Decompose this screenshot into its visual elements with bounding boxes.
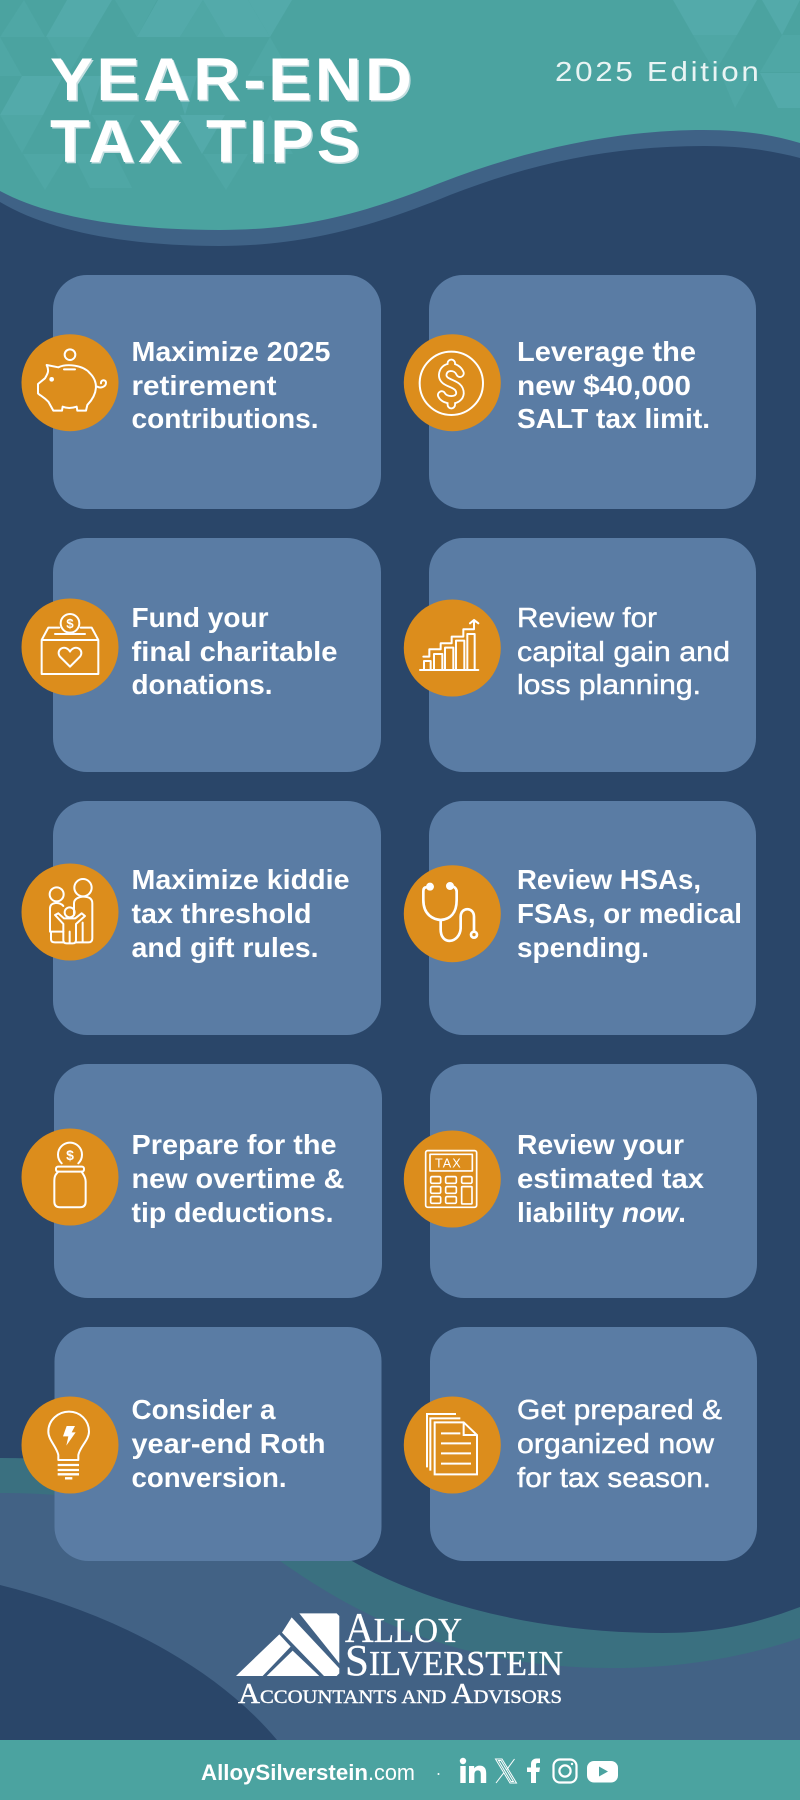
icon: facebook [527, 1758, 540, 1783]
icon: family [50, 879, 92, 943]
tip text: Consider a [132, 1394, 276, 1425]
tip text: capital gain and [517, 636, 730, 667]
icon: light bulb [48, 1412, 89, 1478]
tip text [517, 1129, 704, 1228]
tip text: organized now [517, 1428, 715, 1459]
logo wordmark: ALLOY [345, 1606, 462, 1652]
tip text: and gift rules. [132, 932, 318, 963]
logo wordmark: ACCOUNTANTS AND ADVISORS [238, 1679, 562, 1710]
tip text: retirement [132, 370, 276, 401]
panel: kiddie tax and gift rules [22, 801, 381, 1035]
title: TAX TIPS [50, 108, 360, 175]
tip text: loss planning. [517, 669, 701, 700]
tip text: donations. [132, 669, 272, 700]
tip text: final charitable [132, 636, 338, 667]
panel: retirement contributions [22, 275, 381, 509]
title: YEAR-END [52, 48, 413, 115]
icon: X [496, 1759, 516, 1783]
tip text [517, 864, 742, 963]
title: TAX TIPS [52, 110, 361, 177]
tip text: Maximize kiddie [132, 864, 350, 895]
logo mark [236, 1613, 339, 1676]
logo wordmark [238, 1606, 563, 1710]
icon: donation box [42, 614, 98, 674]
tip text: for tax season. [517, 1462, 711, 1493]
website: .com [368, 1760, 415, 1785]
tip text: year-end Roth [132, 1428, 326, 1459]
title: YEAR-END [50, 46, 412, 113]
icon: rising bar chart [420, 620, 478, 670]
icon: dollar coin [420, 352, 483, 415]
icon: money jar [54, 1143, 86, 1207]
tip text [517, 336, 710, 434]
tip text: liability now. [517, 1197, 686, 1228]
website: AlloySilverstein [201, 1760, 368, 1785]
tip text: FSAs, or medical [517, 898, 742, 929]
tip text [132, 1129, 344, 1228]
panel: Roth conversion [22, 1327, 382, 1561]
panel: overtime and tip deductions [22, 1064, 382, 1298]
icon: instagram [554, 1760, 576, 1782]
tip text: spending. [517, 932, 649, 963]
tip text: new overtime & [132, 1163, 344, 1194]
tip text [132, 336, 330, 434]
icon: piggy bank [38, 349, 106, 411]
tip text: Review for [517, 602, 657, 633]
tip text: SALT tax limit. [517, 403, 710, 434]
tip text [132, 864, 350, 963]
tip text: tax threshold [132, 898, 312, 929]
tip text [132, 602, 338, 700]
tip text: tip deductions. [132, 1197, 334, 1228]
tip text: new $40,000 [517, 370, 691, 401]
tip text: Leverage the [517, 336, 696, 367]
icon: documents [427, 1414, 477, 1474]
tip text: Review your [517, 1129, 684, 1160]
tip text: Prepare for the [132, 1129, 336, 1160]
title [50, 46, 413, 177]
edition label: 2025 Edition [555, 57, 759, 88]
tip text: contributions. [132, 403, 318, 434]
footer wave background [0, 1458, 800, 1740]
icon: money jar: $ [66, 1147, 74, 1163]
separator dot [438, 1773, 440, 1775]
tip text [517, 1394, 722, 1493]
panel: estimated tax liability [404, 1064, 757, 1298]
tip text: Maximize 2025 [132, 336, 330, 367]
icon: youtube [587, 1761, 618, 1782]
panel: charitable donations [22, 538, 381, 772]
header banner with wave [0, 0, 800, 246]
logo wordmark: SILVERSTEIN [345, 1636, 563, 1685]
icon: donation box: $ [66, 616, 74, 631]
panel: capital gain and loss [404, 538, 756, 772]
tip text: Fund your [132, 602, 269, 633]
icon: stethoscope [423, 883, 477, 941]
icon: tax calculator: TAX [435, 1156, 461, 1170]
panel: HSAs and FSAs [404, 801, 756, 1035]
tip text: Review HSAs, [517, 864, 701, 895]
tip text: conversion. [132, 1462, 286, 1493]
panel: prepared for tax season [404, 1327, 757, 1561]
icon: tax calculator [426, 1151, 477, 1207]
company logo [236, 1606, 563, 1710]
tip text: Get prepared & [517, 1394, 722, 1425]
panel: SALT tax limit [404, 275, 756, 509]
tip text [517, 602, 730, 700]
icon: linkedin [460, 1758, 486, 1783]
tip text [132, 1394, 326, 1493]
tip text: estimated tax [517, 1163, 704, 1194]
footer bar [0, 1740, 800, 1800]
